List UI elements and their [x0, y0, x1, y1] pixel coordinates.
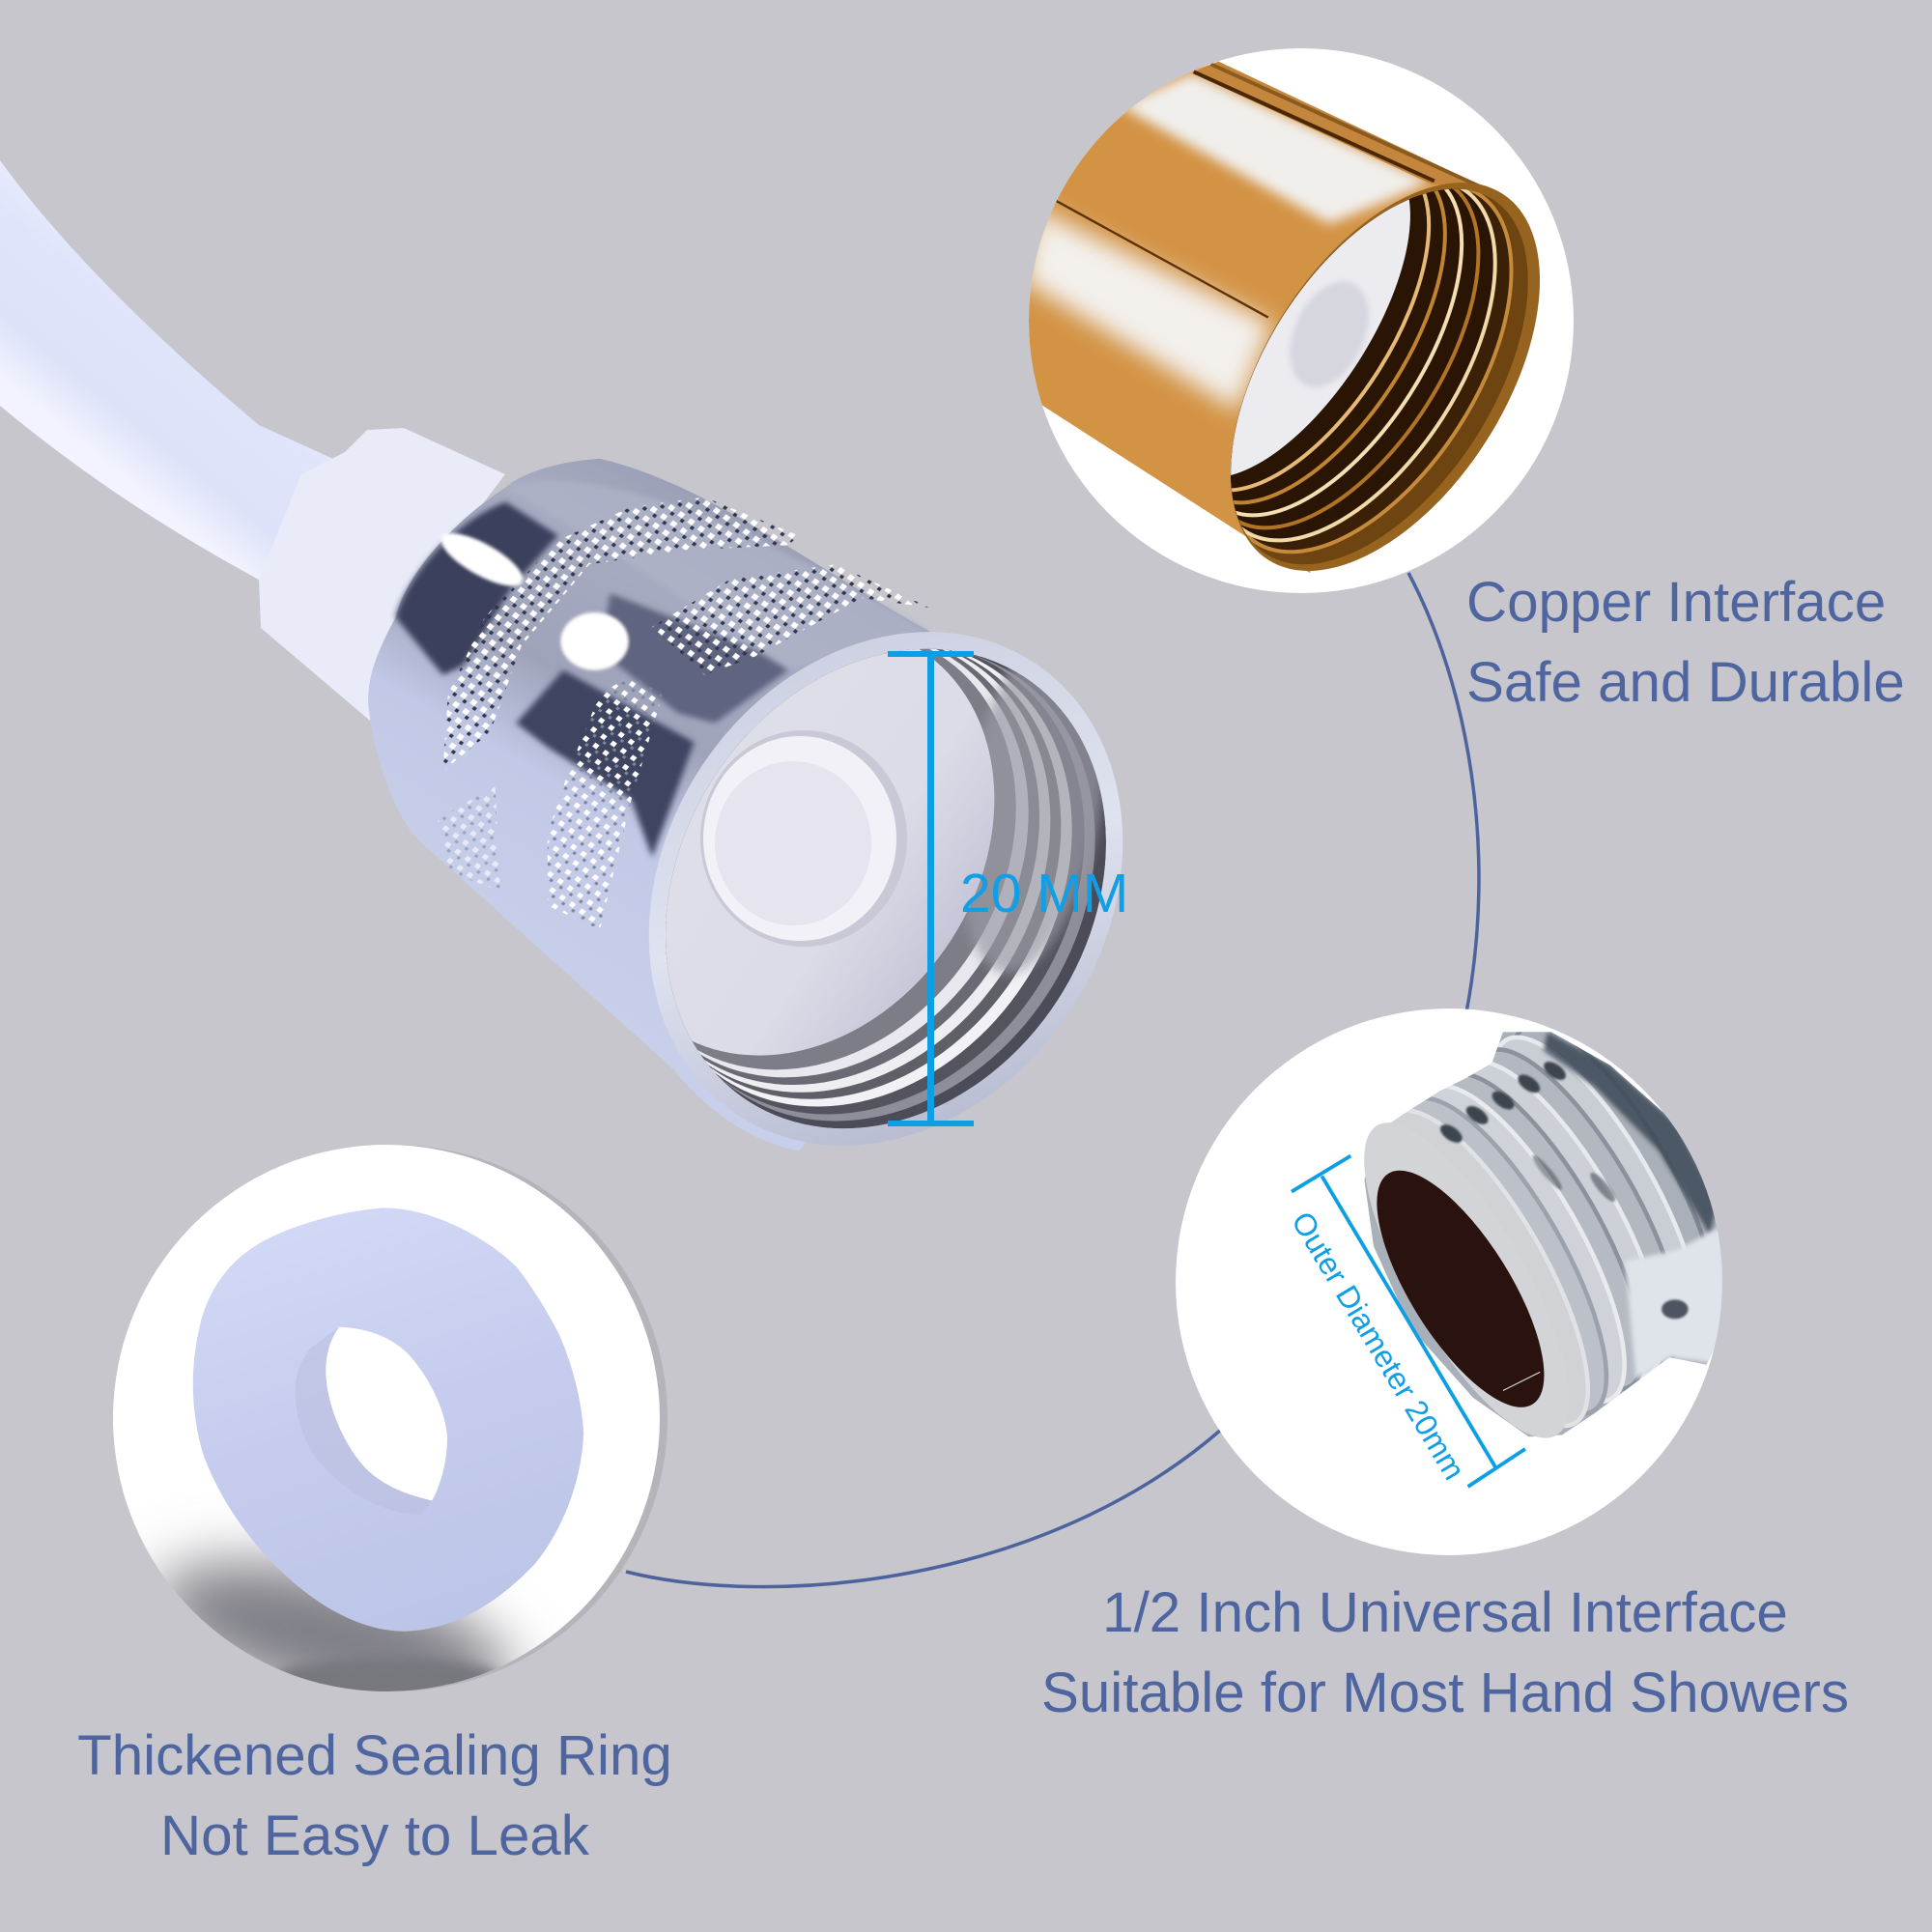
copper fitting: [1029, 62, 1540, 573]
dimension bar: outer diameter: [1292, 1155, 1525, 1487]
front rim: [553, 541, 1219, 1236]
connector line: sealing ring to universal interface: [626, 1430, 1221, 1587]
white seal washer: [700, 730, 907, 947]
ground shadow: [147, 1522, 539, 1691]
back wall: [666, 649, 995, 1056]
connector line: copper to universal interface: [1408, 573, 1479, 1012]
main chrome connector: [368, 458, 1124, 1151]
caption: universal interface: 1/2 Inch Universal Interface: [1102, 1581, 1788, 1644]
rotated dimension label: Outer Diameter 20mm: [1285, 1206, 1472, 1486]
dimension label: 20 MM: [960, 863, 1128, 924]
caption: sealing ring: Not Easy to Leak: [160, 1804, 590, 1867]
translucent sealing ring: [193, 1208, 583, 1632]
caption: copper interface: [1466, 571, 1905, 714]
dimension bar: 20 MM: [888, 651, 974, 1126]
hose collar: [259, 428, 505, 721]
caption: sealing ring: Thickened Sealing Ring: [77, 1724, 672, 1787]
caption: copper interface: Safe and Durable: [1466, 651, 1905, 714]
caption: universal interface: [1041, 1581, 1849, 1724]
caption: universal interface: Suitable for Most Hand Showers: [1041, 1662, 1849, 1724]
circle offset shadow: [121, 1145, 668, 1691]
white hose tube: [0, 160, 386, 657]
chrome body shell: [368, 459, 1019, 1151]
silver threaded fitting: [1291, 1032, 1722, 1489]
panel: sealing ring circle: [113, 1145, 668, 1742]
panel: universal interface circle: [1176, 999, 1753, 1555]
caption: sealing ring: [77, 1724, 672, 1867]
internal thread: [666, 649, 1106, 1128]
caption: copper interface: Copper Interface: [1466, 571, 1886, 634]
panel: copper interface circle: [1029, 48, 1574, 593]
